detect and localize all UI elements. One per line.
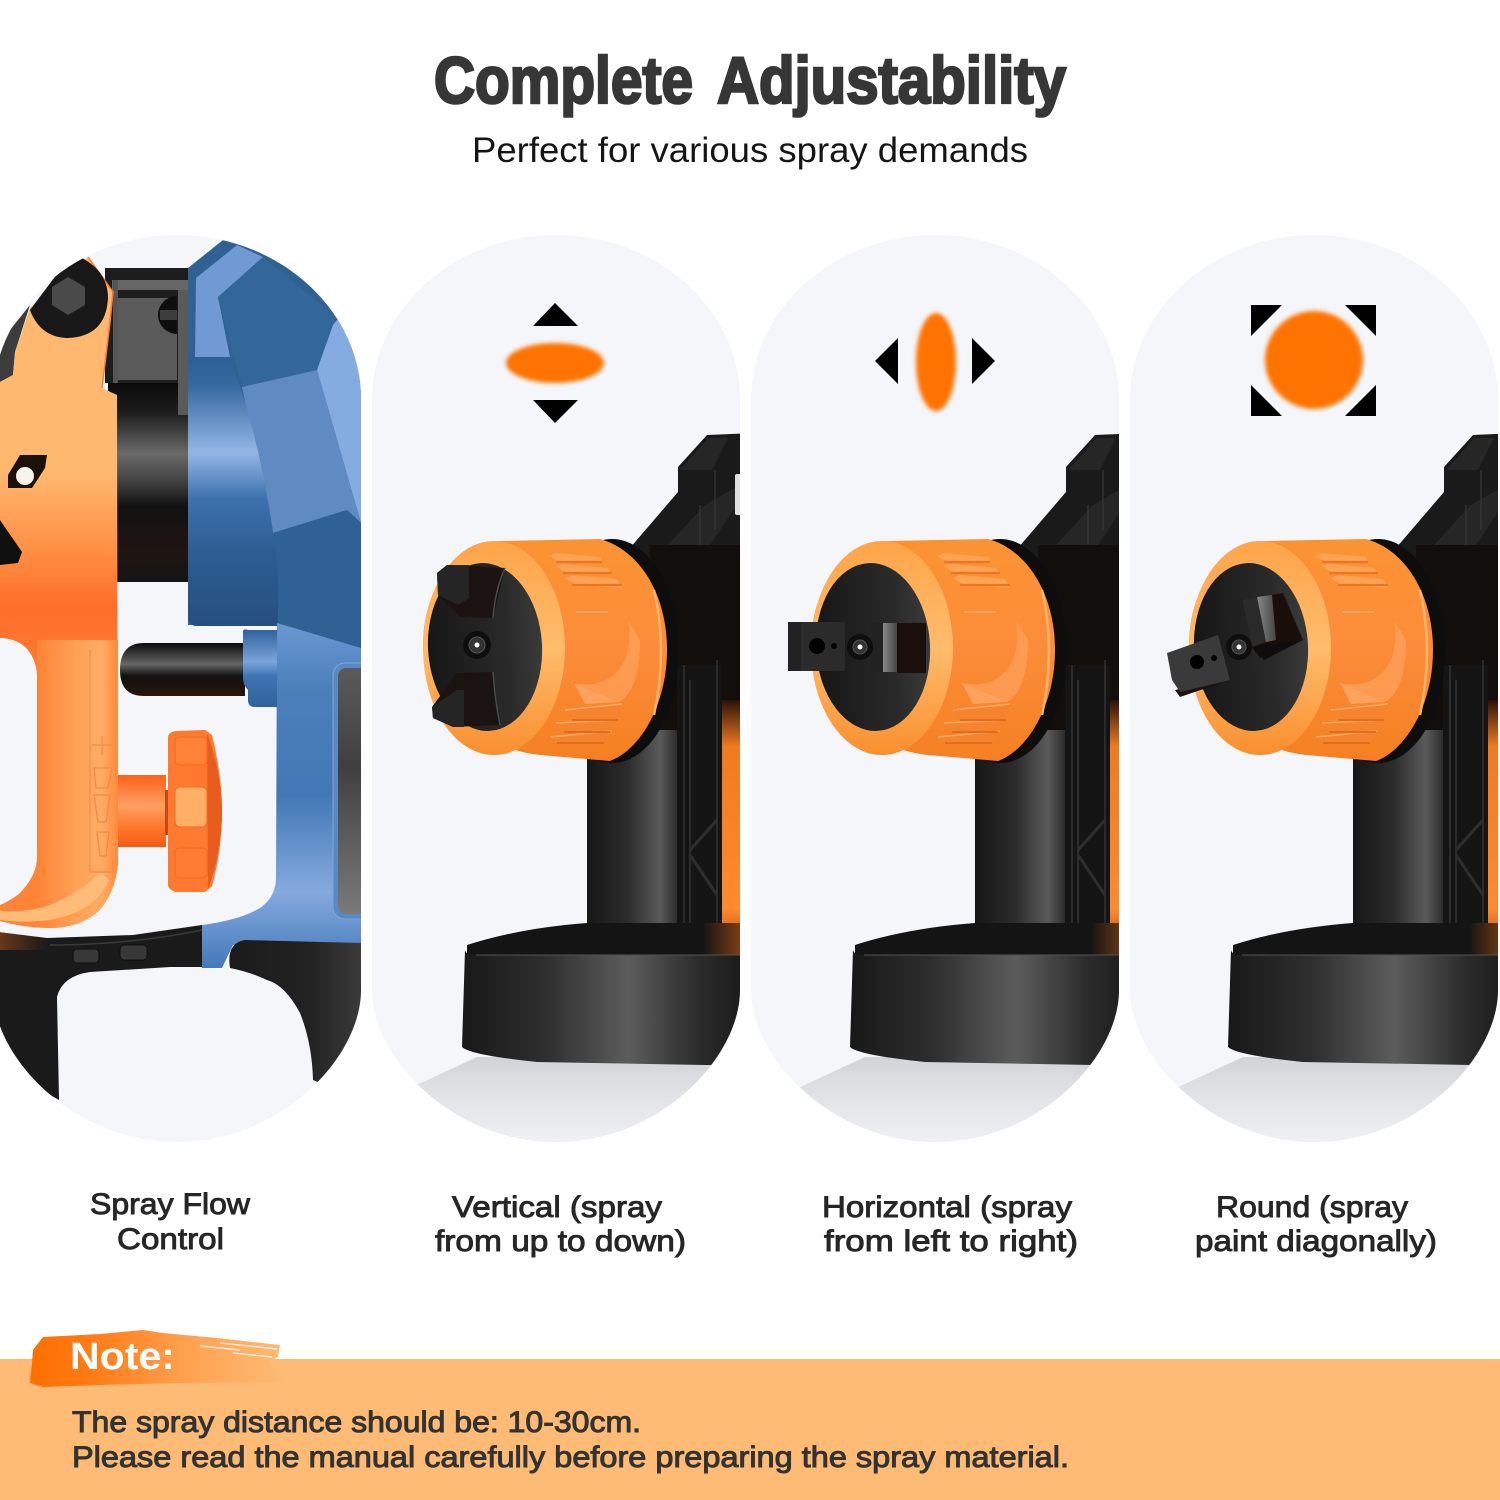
title bbox=[434, 43, 1066, 117]
spray gun bbox=[800, 434, 1119, 1136]
spray gun bbox=[418, 434, 740, 1136]
title: Complete bbox=[434, 43, 693, 117]
panel background bbox=[1130, 235, 1498, 1142]
arrows and spray pattern bbox=[875, 313, 995, 411]
black hex knob bbox=[30, 258, 108, 338]
blue handle lower bbox=[202, 623, 361, 968]
label: vertical bbox=[435, 1191, 686, 1258]
panel: round bbox=[1130, 235, 1500, 1150]
label: horizontal bbox=[822, 1191, 1078, 1258]
label: horizontal: from left to right) bbox=[824, 1225, 1078, 1258]
trigger markings bbox=[90, 650, 113, 872]
note heading: Note: bbox=[70, 1336, 175, 1378]
blue housing upper bbox=[188, 240, 361, 650]
orange trigger body bbox=[0, 257, 118, 928]
blue collar bbox=[243, 629, 277, 707]
label: spray flow control: Spray Flow bbox=[90, 1188, 250, 1221]
title: Adjustability bbox=[717, 43, 1066, 117]
label: vertical: Vertical (spray bbox=[452, 1191, 662, 1224]
nozzle: vertical bbox=[432, 565, 505, 727]
body edge line bbox=[88, 257, 113, 388]
label: round: Round (spray bbox=[1216, 1191, 1408, 1224]
arrows and spray pattern bbox=[1251, 305, 1376, 416]
black grip right bbox=[229, 940, 361, 1082]
panel background bbox=[751, 235, 1119, 1142]
label: spray flow control: Control bbox=[117, 1223, 224, 1256]
spray gun bbox=[1161, 431, 1500, 1150]
subtitle: Perfect for various spray demands bbox=[472, 131, 1028, 170]
gray window bbox=[332, 662, 361, 920]
dark notch behind body bbox=[0, 305, 30, 382]
panel background bbox=[372, 235, 740, 1142]
note brush stroke bbox=[30, 1330, 287, 1387]
orange handle shading bbox=[0, 640, 118, 928]
label: spray flow control bbox=[90, 1188, 250, 1256]
handle crescent bbox=[0, 872, 109, 922]
panel background bbox=[0, 235, 317, 1142]
orange dial bbox=[118, 730, 222, 892]
handle opening bbox=[0, 638, 37, 908]
arrows and spray pattern bbox=[506, 303, 604, 423]
label: round bbox=[1195, 1191, 1437, 1258]
left hole bbox=[8, 455, 47, 488]
label: vertical: from up to down) bbox=[435, 1225, 686, 1258]
panel: spray flow control bbox=[0, 235, 374, 1142]
black grip left bbox=[0, 925, 202, 1100]
black cylinder bbox=[108, 380, 192, 582]
note text: The spray distance should be: 10-30cm. bbox=[72, 1406, 641, 1439]
label: horizontal: Horizontal (spray bbox=[822, 1191, 1072, 1224]
spray gun close-up bbox=[0, 240, 374, 1100]
black pin bbox=[120, 643, 245, 696]
panel: vertical bbox=[372, 235, 740, 1142]
note bar bbox=[0, 1359, 1500, 1500]
note text: Please read the manual carefully before preparing the spray material. bbox=[72, 1441, 1069, 1474]
black triangle bbox=[0, 520, 22, 565]
panel: horizontal bbox=[751, 235, 1119, 1142]
label: round: paint diagonally) bbox=[1195, 1225, 1437, 1258]
gray bracket bbox=[105, 268, 189, 415]
note text bbox=[72, 1406, 1069, 1474]
nozzle: diagonal bbox=[1167, 593, 1303, 697]
nozzle: horizontal bbox=[788, 622, 926, 673]
